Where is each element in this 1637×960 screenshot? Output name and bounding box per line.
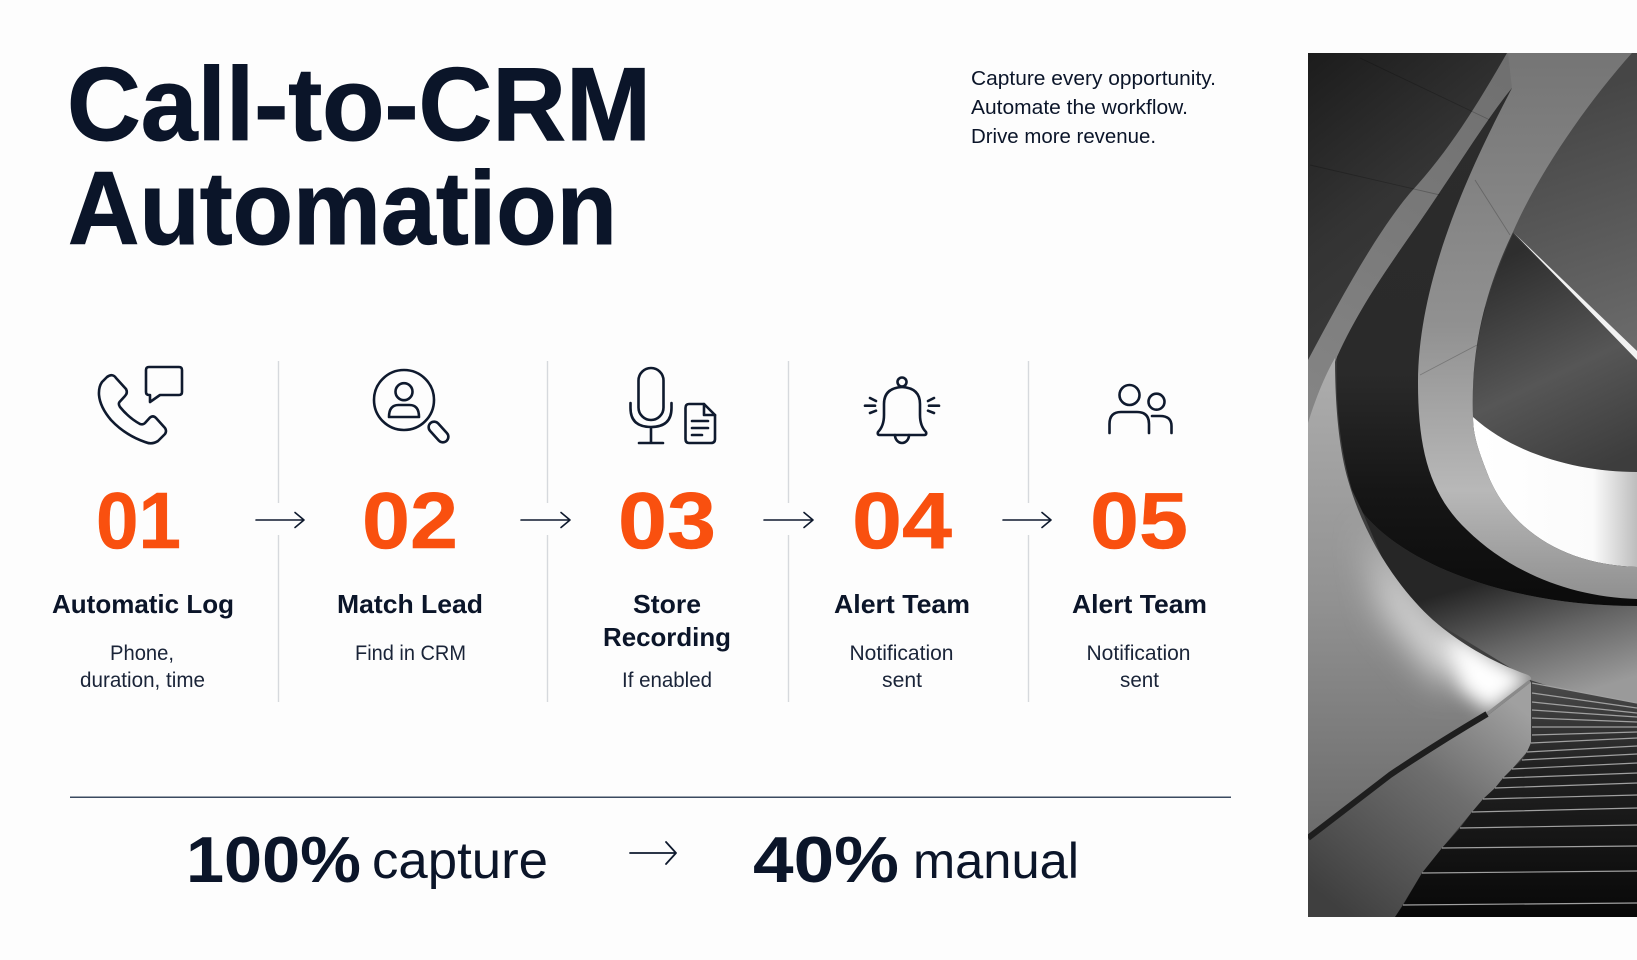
stat: 100% capture: 100% (186, 823, 361, 896)
panel: step 01 (52, 367, 234, 692)
description: Notification (1086, 642, 1190, 665)
description (80, 642, 205, 692)
heading: Alert Team: Alert Team (1072, 589, 1207, 619)
description: sent (1120, 669, 1159, 692)
description: Phone, (110, 642, 174, 665)
title: Call-to-CRM (67, 47, 651, 163)
description (850, 642, 954, 692)
heading: Alert Team: Alert Team (834, 589, 970, 619)
heading: Match Lead: Match Lead (337, 589, 483, 619)
step dividers (278, 361, 1028, 702)
arrow 1 (256, 512, 304, 528)
number 02: 02 (362, 476, 458, 565)
title: Automation (68, 151, 617, 267)
heading: Store Recording: Store (633, 589, 701, 619)
stat: 40% manual (753, 823, 1079, 896)
panel: step 02 (337, 370, 483, 665)
stat: 40% manual: manual (913, 833, 1079, 889)
title (67, 47, 651, 267)
panel: step 05 (1072, 385, 1207, 692)
icon: bell (865, 378, 939, 443)
heading: Automatic Log: Automatic Log (52, 589, 234, 619)
number 03: 03 (618, 476, 716, 565)
stat: 100% capture: capture (372, 832, 548, 890)
arrow: stat transition (630, 842, 676, 864)
panel: step 03 (603, 368, 731, 692)
description: sent (882, 669, 922, 692)
tagline text block (971, 67, 1216, 148)
bottom rule (70, 796, 1231, 798)
description: duration, time (80, 669, 205, 692)
description (1086, 642, 1190, 692)
description: Notification (850, 642, 954, 665)
arrow 3 (764, 512, 813, 528)
tagline text block: Capture every opportunity. (971, 67, 1216, 90)
number 05: 05 (1090, 476, 1188, 565)
heading: Store Recording (603, 589, 731, 652)
photo: abstract concrete staircase architecture (1308, 53, 1637, 917)
heading: Store Recording: Recording (603, 622, 731, 652)
arrow 2 (521, 512, 570, 528)
icon: microphone and document (630, 368, 715, 443)
number 04: 04 (852, 476, 953, 565)
stat: 40% manual: 40% (753, 823, 899, 896)
description: If enabled (622, 669, 712, 692)
tagline text block: Drive more revenue. (971, 125, 1156, 148)
tagline text block: Automate the workflow. (971, 96, 1188, 119)
description: Find in CRM (355, 642, 466, 665)
arrow 4 (1003, 512, 1051, 528)
icon: team of people (1110, 385, 1172, 433)
number 01: 01 (96, 476, 181, 565)
stat: 100% capture (186, 823, 548, 896)
icon: phone with speech bubble (99, 367, 182, 443)
icon: magnifier with person (374, 370, 451, 445)
panel: step 04 (834, 378, 970, 692)
